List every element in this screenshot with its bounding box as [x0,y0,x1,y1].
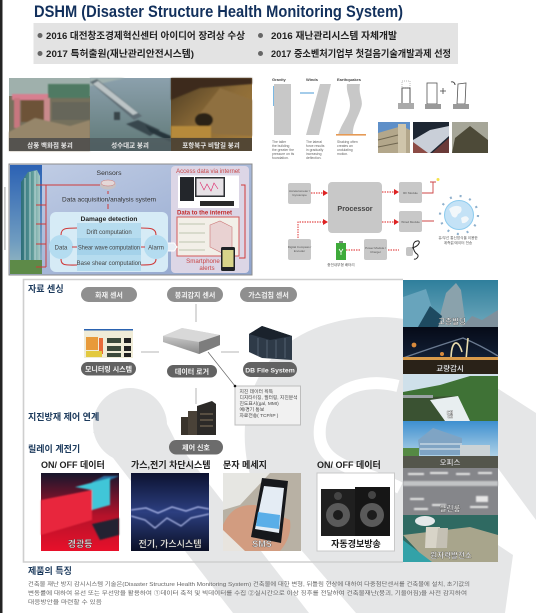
diagram: processor block diagram: Gyroscope [292,193,307,197]
panel: damage detection: Data [55,246,68,252]
callout: data logger functions: 디지타이징, 필터링, 지진분석 [240,394,298,401]
photo: clean room: 클린룸 [440,503,460,513]
photo: nuclear plant [403,515,498,562]
pill: fire sensor [81,287,137,302]
callout: data logger functions [208,352,300,425]
sensor wiring [36,185,108,267]
diagram: processor block diagram: 유/무선 통신방식을 이용한 [438,235,478,240]
photo: office building: 오피스 [440,458,460,467]
diagram: processor block diagram: Charger [370,250,381,254]
callout: data logger functions: 자료전송( TCP/IP ) [240,412,279,419]
photo: department store collapse: 삼풍 백화점 붕괴 [27,140,73,150]
diagram: gravity winds earthquakes: Earthquakes [337,77,362,82]
photo: Pohang road landslide: 포항북구 비탈길 붕괴 [182,140,240,150]
pill: monitoring system [81,362,136,376]
diagram: gravity winds earthquakes: pressure on its [272,152,295,156]
icon: data logger [163,328,220,354]
card: warning light [41,459,119,551]
photo: leaning tower [378,122,410,153]
diagram: gravity winds earthquakes: The lateral [306,140,322,144]
pill: monitoring system: 모니터링 시스템 [85,364,132,374]
photo: Seongsu bridge collapse [90,78,171,151]
panel: system box [24,280,403,562]
diagram: gravity winds earthquakes: motion. [337,152,348,156]
photo: high-rise: 고층빌딩 [438,316,466,326]
card: auto alert broadcast: 자동경보방송 [331,538,381,549]
diagram: processor block diagram: Wired Module [401,220,420,224]
icon: plug [406,241,419,259]
diagram: processor block diagram: 계측값/데이터 전송 [444,240,473,245]
diagram: processor block diagram: Power Module / [365,246,386,250]
panel: internet access: Smartphone [186,258,220,265]
panel: internet access: Access data via internet [176,169,240,175]
callout: data logger functions: 지진 데이터 획득 [240,388,274,395]
diagram: foundation settlement schematics [398,81,469,109]
heading: product features: 제품의 특징 [28,565,72,576]
diagram: gravity winds earthquakes: Gravity [272,77,287,82]
icon: battery [327,241,355,267]
photo: Seongsu bridge collapse: 성수대교 붕괴 [111,140,149,150]
diagram: processor block diagram [288,178,478,267]
card: warning light: ON/ OFF 데이터 [41,459,105,470]
photo: clean room [403,468,498,515]
diagram: gravity winds earthquakes: undulating [337,148,353,152]
sensor labels [62,170,156,204]
panel: achievements [34,23,458,64]
panel: damage detection: Shear wave computation [78,246,140,252]
callout: data logger functions: 진도표시(gal, MMI) [240,400,279,407]
panel: damage detection: Alarm [148,246,164,252]
icon: database racks [249,326,292,360]
diagram: processor block diagram: Encoder [294,249,305,253]
text: product description: 변동률에 대하여 유선 또는 무선망을 활용하여 ①데이터 축적 및 빅데이터를 수집 ②실시간으로 이상 징후를 전달하여 건축물재난(붕괴, 기울어짐)을 사전 감지하여 [28,589,467,597]
pill: collapse sensor [167,287,223,302]
photo: nuclear plant: 원자력발전소 [430,550,472,560]
panel: internet access: Data to the internet [177,210,233,216]
heading: data sensing: 자료 센싱 [28,283,64,294]
panel: damage detection: Damage detection [81,216,137,223]
panel: internet access [168,166,249,273]
icon: battery: 충전내부형 배터리 [327,262,355,267]
pill: data logger: 데이터 로거 [175,367,209,376]
heading: seismic control link: 지진방재 제어 연계 [28,411,99,422]
photo: bridge monitoring [403,327,498,374]
diagram: gravity winds earthquakes: Winds [306,77,319,82]
callout: data logger functions: 예/경기 통보 [240,406,265,413]
diagram: gravity winds earthquakes [272,77,366,160]
panel: damage detection [49,212,168,272]
photo: dam [403,374,498,421]
card: SMS: SMS [252,539,272,549]
diagram: gravity winds earthquakes: The taller [272,140,287,144]
card: warning light: 경광등 [68,538,92,549]
diagram: gravity winds earthquakes: Shaking often [337,140,358,144]
photo: slope failure [413,122,449,153]
icon: sensor [100,180,116,190]
icon: monitoring screen [84,329,133,358]
diagram: processor block diagram: Digital Compass / [288,245,311,249]
diagram: gravity winds earthquakes: the building [272,144,289,148]
diagram: processor block diagram: Accelerometer / [289,189,310,193]
card: auto alert broadcast [317,459,394,551]
card: gas electric cut-off: 전기, 가스시스템 [139,538,201,549]
diagram: gravity winds earthquakes: increasing [306,152,322,156]
card: gas electric cut-off [131,459,211,551]
panel: achievements: 2017 특허출원(재난관리안전시스템) [46,48,194,60]
diagram: gravity winds earthquakes: the greater the [272,148,294,152]
card: auto alert broadcast: ON/ OFF 데이터 [317,459,381,470]
card: SMS: 문자 메세지 [223,459,267,470]
building photo [10,165,42,274]
photo: bridge monitoring: 교량감시 [436,363,464,373]
panel: achievements: 2016 대전창조경제혁신센터 아이디어 장려상 수상 [46,30,245,42]
diagram: gravity winds earthquakes: in gradually [306,148,324,152]
diagram: gravity winds earthquakes: force results [306,144,325,148]
diagram: gravity winds earthquakes: deflection. [306,156,322,160]
pill: gas sensor: 가스검침 센서 [248,290,289,300]
diagram: processor block diagram: RF Module [403,191,418,195]
photo: Pohang road landslide [171,78,252,151]
pill: gas sensor [240,287,297,302]
panel: damage detection: Drift computation [86,230,132,236]
photo: high-rise [403,280,498,327]
diagram: gravity winds earthquakes: creates an [337,144,353,148]
photo: dam: 댐 [447,409,454,419]
photo: office building [403,421,498,468]
sensor labels: Sensors [97,170,122,177]
panel: monitoring system diagram [9,164,252,275]
pill: fire sensor: 화재 센서 [95,290,123,300]
icon: globe [440,196,478,234]
panel: achievements: 2017 중소벤처기업부 첫걸음기술개발과제 선정 [271,48,451,60]
title: DSHM (Disaster Structure Health Monitoring System) [34,2,403,21]
photo: department store collapse [9,78,90,151]
icon: control servers [181,401,216,435]
card: gas electric cut-off: 가스,전기 차단시스템 [131,459,211,470]
panel: internet access: alerts [199,265,215,272]
pill: DB file system: DB File System [245,368,295,374]
pill: DB file system [243,362,297,377]
pill: data logger [167,365,217,378]
text: product description: 대응방안을 마련할 수 있음 [28,598,103,606]
photo: collapsed building [452,122,488,153]
pill: control signal [169,440,223,454]
diagram: processor block diagram: Processor [337,204,373,213]
pill: control signal: 제어 신호 [182,443,210,452]
text: product description [28,580,470,606]
heading: relay: 릴레이 계전기 [28,443,80,454]
panel: damage detection: Base shear computation [77,261,141,267]
diagram: gravity winds earthquakes: foundation. [272,156,289,160]
panel: achievements: 2016 재난관리시스템 자체개발 [271,30,397,42]
sensor labels: Data acquisition/analysis system [62,196,156,204]
pill: collapse sensor: 붕괴감지 센서 [175,290,215,300]
text: product description: 건축물 재난 방지 감시시스템 기술은(Disaster Structure Health Monitoring System) 건축물에 대한 변형, 뒤틀림 현상에 대하여 다중첨단센서를 건축물에 설치, 초기값의 [28,580,470,588]
card: SMS [223,459,301,551]
